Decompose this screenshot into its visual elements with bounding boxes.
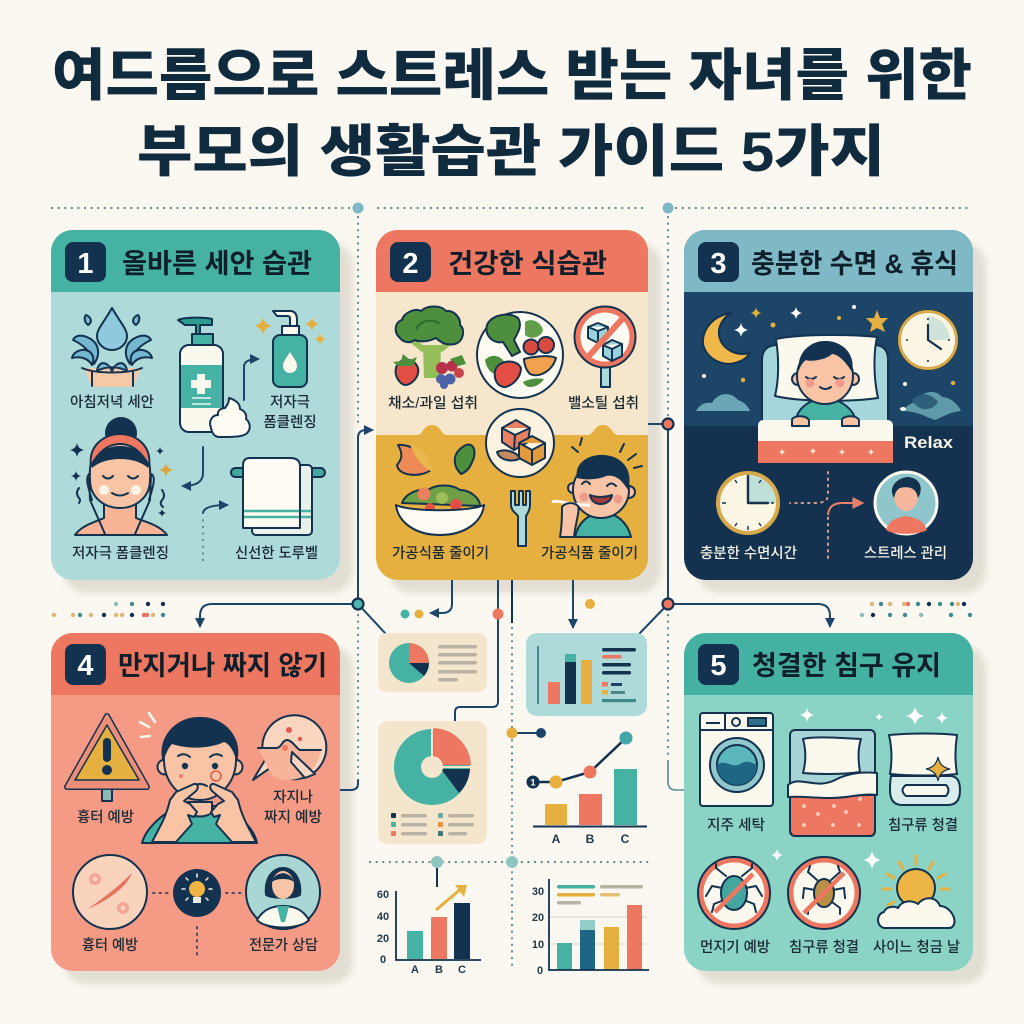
labels: 가공식품 줄이기 — [392, 545, 638, 562]
icon: skin speech bubble — [253, 715, 326, 780]
chart: line and bars A B C: B — [586, 832, 595, 846]
icon: boy touching face — [140, 713, 257, 843]
label: 침구류 청결: 침구류 청결 — [888, 817, 958, 834]
heading 2: 건강한 식습관 — [448, 249, 607, 279]
labels bottom: 흉터 예방 — [82, 937, 138, 954]
number badge 5: 5 — [710, 650, 727, 682]
labels: 가공식품 줄이기: 가공식품 줄이기 — [541, 545, 638, 562]
icon: fork — [511, 491, 530, 546]
icon: water splash — [72, 308, 152, 387]
number badge 3 — [698, 242, 739, 282]
label: 지주 세탁: 지주 세탁 — [707, 817, 765, 834]
label: 흉터 예방 (top): 흉터 예방 — [77, 809, 134, 826]
label: 자지나 짜지 예방: 짜지 예방 — [264, 809, 322, 826]
chart: bars 0-30: 10 — [532, 939, 544, 951]
label: 저자극 폼클렌징 (right) — [263, 394, 317, 431]
label: 저자극 폼클렌징 (right): 폼클렌징 — [263, 414, 317, 431]
chart: line and bars A B C — [526, 732, 647, 846]
panel 2: 건강한 식습관 — [376, 230, 648, 580]
chart: bars 0-60: 0 — [380, 954, 386, 966]
panel 1: 올바른 세안 습관 — [51, 230, 340, 580]
labels bottom — [82, 937, 318, 954]
title: 부모의 생활습관 가이드 5가지 — [137, 120, 885, 183]
label: 저자극 폼클렌징 (right): 저자극 — [270, 394, 310, 411]
labels bottom: 먼지기 예방 — [700, 939, 770, 956]
chart: bars 0-30 — [532, 879, 649, 977]
icon: protein foods circle — [486, 409, 554, 477]
title: 여드름으로 스트레스 받는 자녀를 위한 — [52, 44, 972, 107]
label: 채소/과일 섭취: 채소/과일 섭취 — [388, 395, 478, 412]
chart: bars 0-60: A — [411, 964, 419, 976]
connector lines and network nodes — [52, 202, 972, 970]
icon: broccoli and fruits — [393, 306, 466, 389]
number badge 5 — [698, 644, 739, 685]
number badge 1 — [65, 242, 106, 282]
chart: bar card — [526, 633, 647, 716]
icon: no bed bug — [771, 849, 881, 929]
icon: clouds — [696, 392, 961, 420]
panel 5: 청결한 침구 유지 — [684, 633, 973, 971]
label: 밸소틸 섭취: 밸소틸 섭취 — [568, 395, 639, 412]
number badge 4: 4 — [77, 650, 94, 682]
chart: bars 0-30: 20 — [532, 912, 544, 924]
chart: bars 0-60: C — [458, 964, 466, 976]
chart: bars 0-30: 30 — [532, 886, 544, 898]
icon: sleeping child in bed — [758, 335, 893, 463]
panel 3: 충분한 수면 & 휴식 — [684, 230, 973, 580]
chart: bars 0-60: 20 — [377, 933, 389, 945]
icon: lightbulb — [173, 869, 221, 917]
icon: washing machine — [700, 713, 773, 806]
icon: salad bowl — [396, 486, 484, 535]
icon: towel — [231, 458, 325, 535]
icon: pillow and folded bedding — [889, 734, 960, 805]
icon: no dust mite — [698, 857, 770, 929]
icon: clean bed — [788, 706, 948, 836]
chart: bars 0-60: B — [435, 964, 443, 976]
icon: no sugar sign — [574, 306, 636, 387]
arrow: coral to person — [828, 503, 862, 558]
dotted arrow to towel — [203, 505, 227, 560]
heading 3: 충분한 수면 & 휴식 — [751, 249, 958, 279]
labels bottom: 전문가 상담 — [249, 937, 318, 954]
label: 저자극 폼클렌징 (bottom): 저자극 폼클렌징 — [72, 545, 169, 562]
labels: sleep and stress — [700, 545, 947, 562]
chart: bars 0-60: 60 — [377, 889, 389, 901]
chart: line and bars A B C: A — [552, 832, 561, 846]
number badge 1: 1 — [77, 248, 94, 280]
labels: sleep and stress: 충분한 수면시간 — [700, 545, 797, 562]
chart: bars 0-60: 40 — [377, 911, 389, 923]
title — [52, 44, 972, 183]
heading 1: 올바른 세안 습관 — [122, 249, 312, 279]
labels: sleep and stress: 스트레스 관리 — [864, 545, 947, 562]
labels bottom: 사이느 청금 날 — [873, 939, 960, 956]
label: Relax: Relax — [904, 433, 954, 452]
icon: small cleansing bottle — [254, 311, 326, 387]
chart: bars 0-60 — [377, 885, 481, 976]
dotted links around bulb — [153, 893, 241, 955]
icon: moon and stars — [702, 305, 955, 386]
label: 자지나 짜지 예방 — [264, 789, 322, 826]
icon: vegetables above salad — [397, 444, 474, 475]
icon: wall clock — [898, 310, 958, 370]
number badge 3: 3 — [710, 248, 727, 280]
icon: scar circle — [73, 855, 147, 929]
number badge 2: 2 — [402, 248, 419, 280]
chart: donut card — [378, 721, 487, 844]
number badge 2 — [390, 242, 431, 282]
chart: line and bars A B C: 1 — [530, 778, 536, 788]
heading 5: 청결한 침구 유지 — [752, 651, 941, 681]
icon: food plate — [477, 312, 563, 398]
number badge 4 — [65, 644, 106, 685]
label: 아침저녁 세안: 아침저녁 세안 — [70, 394, 154, 411]
icon: person circle — [875, 472, 937, 534]
labels: 가공식품 줄이기: 가공식품 줄이기 — [392, 545, 489, 562]
chart: small pie card — [378, 633, 487, 692]
icon: happy boy eating — [552, 438, 642, 537]
arrow: bottle to face — [183, 447, 203, 486]
labels bottom — [700, 939, 960, 956]
icon: warning sign — [67, 716, 147, 801]
label: 신선한 도루벨: 신선한 도루벨 — [235, 545, 318, 562]
labels bottom: 침구류 청결 — [789, 939, 859, 956]
icon: bedtime clock — [718, 473, 778, 533]
icon: face washing — [70, 417, 173, 535]
chart: line and bars A B C: C — [621, 832, 630, 846]
icon: pump bottle with foam — [178, 318, 250, 437]
dotted connector — [790, 472, 828, 503]
heading 4: 만지거나 짜지 않기 — [118, 651, 327, 681]
arrow: bottle to small bottle — [244, 359, 258, 400]
icon: doctor circle — [246, 855, 320, 929]
chart: bars 0-30: 0 — [537, 965, 543, 977]
icon: sun and cloud — [878, 856, 955, 928]
panel 4: 만지거나 짜지 않기 — [51, 633, 340, 971]
label: 자지나 짜지 예방: 자지나 — [273, 789, 313, 806]
